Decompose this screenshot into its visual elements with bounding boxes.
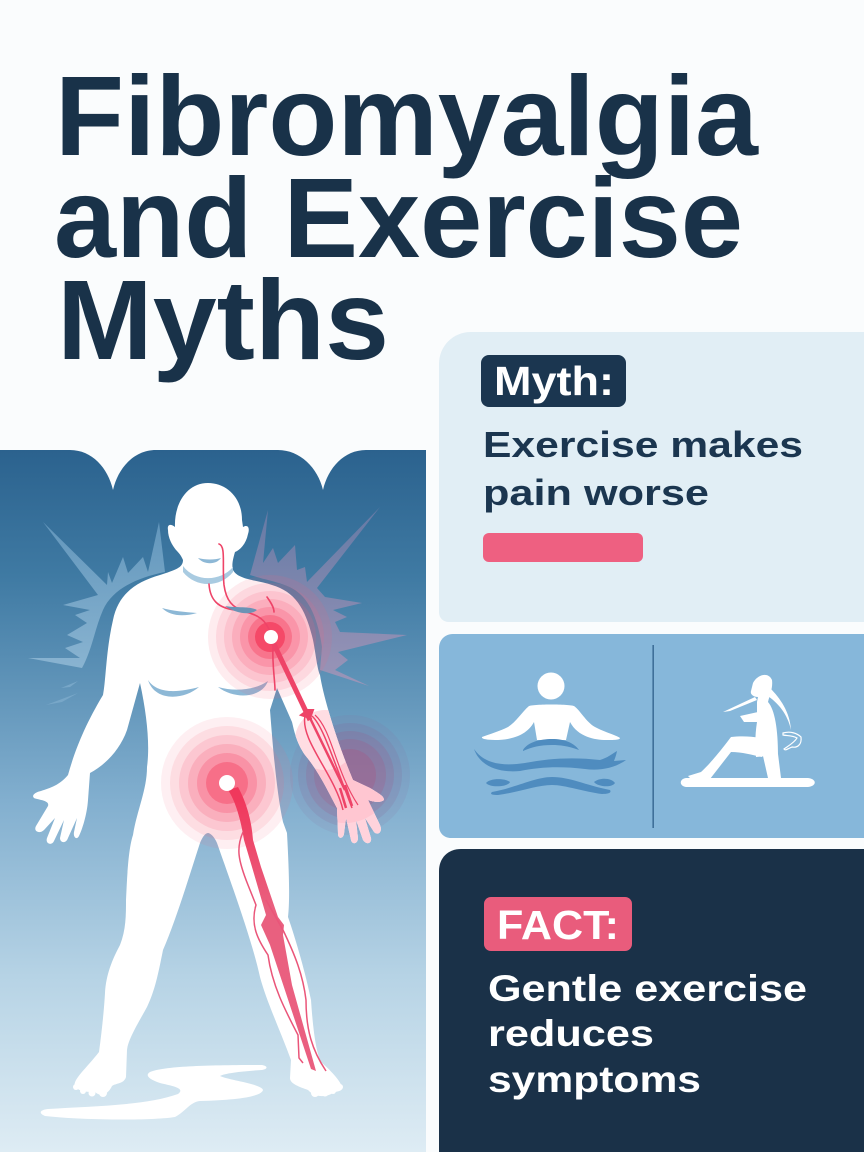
title: Myths: [57, 257, 389, 383]
hair ribbon: [783, 732, 801, 750]
board: [681, 778, 815, 787]
nerve lines: leg: [228, 787, 326, 1071]
pain halo: wrist: [290, 715, 410, 835]
myth panel background: [439, 332, 864, 622]
myth tag: [481, 355, 626, 407]
head and hair: [751, 675, 772, 702]
pain point: hip: [161, 717, 293, 849]
raised arm: [740, 712, 762, 722]
torso: [755, 702, 778, 757]
myth text: pain worse: [483, 472, 709, 513]
myth text: Exercise makes: [483, 424, 803, 465]
shadow under collarbone: [225, 606, 257, 613]
front leg: [688, 736, 762, 779]
myth tag: Myth:: [494, 358, 614, 404]
myth text: [483, 424, 803, 513]
fact panel background: [439, 849, 864, 1152]
panel: exercise icons: [439, 634, 864, 838]
title: [54, 53, 759, 383]
puddle: [41, 1065, 266, 1120]
panel: myth: [439, 332, 864, 622]
panel: fact: [439, 849, 864, 1152]
fact tag: FACT:: [497, 902, 619, 948]
panel: body illustration: [0, 450, 426, 1152]
pain burst: right: [250, 507, 407, 686]
icon: swimmer in water: [474, 672, 626, 795]
panel background: [0, 450, 426, 1152]
divider: [652, 645, 654, 828]
face and chest details: [148, 558, 268, 697]
fact text: [488, 968, 807, 1100]
pink wash on forearm and hand: [296, 710, 384, 844]
title: and Exercise: [54, 155, 743, 281]
pain burst: left: [28, 522, 165, 668]
nerve lines: neck and shoulder: [209, 544, 275, 690]
icon: kneeling figure with flute: [681, 675, 815, 787]
fact text: Gentle exercise: [488, 968, 807, 1009]
fact tag: [484, 897, 632, 951]
icons panel background: [439, 634, 864, 838]
nerve lines: arm: [272, 640, 358, 810]
myth red bar: [483, 533, 643, 562]
hair tail: [766, 688, 791, 730]
fact text: reduces: [488, 1013, 654, 1054]
pain point markers: [264, 630, 278, 644]
title: Fibromyalgia: [55, 53, 759, 179]
pain point: shoulder: [208, 575, 332, 699]
small spark lines: [46, 681, 78, 705]
toes: [73, 1084, 343, 1097]
body silhouette: [33, 483, 384, 1096]
kneeling shin: [763, 754, 781, 778]
fact text: symptoms: [488, 1059, 701, 1100]
flute: [723, 697, 757, 712]
